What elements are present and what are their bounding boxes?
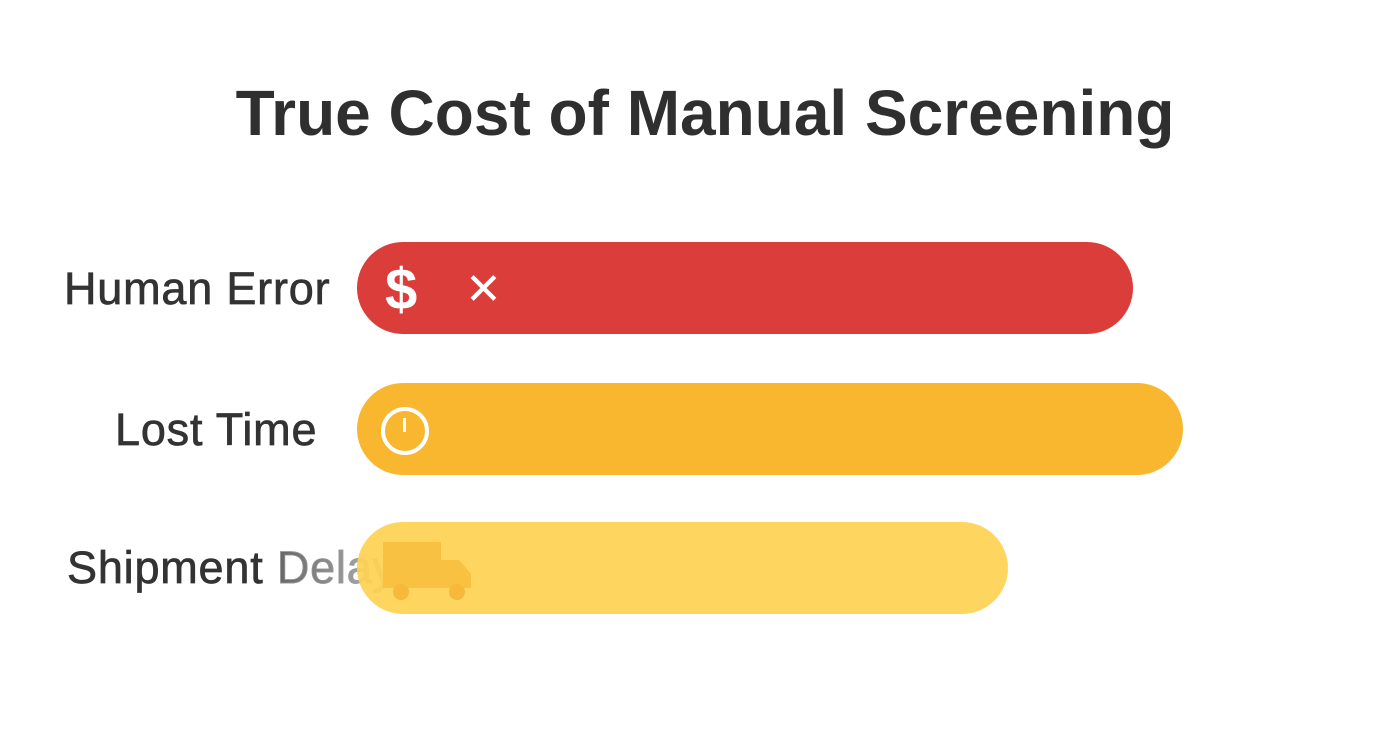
icon: cross: ✕ [465,265,502,314]
label: Lost Time: Lost Time [115,404,317,455]
title: True Cost of Manual Screening [236,77,1174,149]
icon: dollar: $ [385,257,417,322]
icon: clock [381,407,429,455]
bar: Human Error [357,242,1133,334]
icon: truck [383,542,471,600]
bar: Lost Time [357,383,1183,475]
bar: Shipment Delay [357,522,1008,614]
label: Shipment Delay: Shipment Delay [67,542,396,593]
label: Human Error: Human Error [64,263,330,314]
